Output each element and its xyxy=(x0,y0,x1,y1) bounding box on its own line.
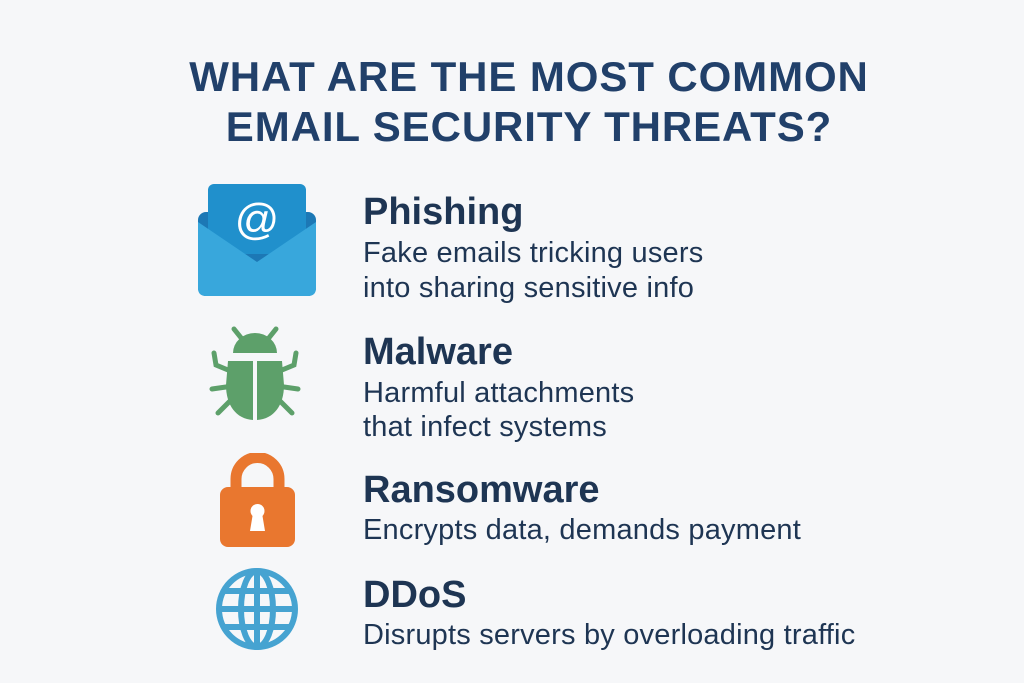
title: WHAT ARE THE MOST COMMON xyxy=(189,53,869,100)
title: EMAIL SECURITY THREATS? xyxy=(226,103,832,150)
text: ddos description: Disrupts servers by overloading traffic xyxy=(363,619,855,651)
icon: envelope: @ xyxy=(235,195,279,244)
heading: ddos: DDoS xyxy=(363,574,466,616)
icon: bug xyxy=(210,326,300,420)
text: malware description: that infect systems xyxy=(363,411,607,443)
heading: ransomware: Ransomware xyxy=(363,469,600,511)
text: phishing description: into sharing sensitive info xyxy=(363,272,694,304)
text: phishing description: Fake emails tricking users xyxy=(363,237,703,269)
heading: malware: Malware xyxy=(363,331,513,373)
icon: globe xyxy=(216,568,298,650)
heading: phishing: Phishing xyxy=(363,191,523,233)
text: ransomware description: Encrypts data, demands payment xyxy=(363,514,801,546)
text: malware description: Harmful attachments xyxy=(363,377,634,409)
icon: envelope xyxy=(198,184,316,296)
icon: padlock xyxy=(220,453,295,547)
text: phishing description xyxy=(363,237,703,304)
text: malware description xyxy=(363,377,634,443)
title xyxy=(189,53,869,150)
